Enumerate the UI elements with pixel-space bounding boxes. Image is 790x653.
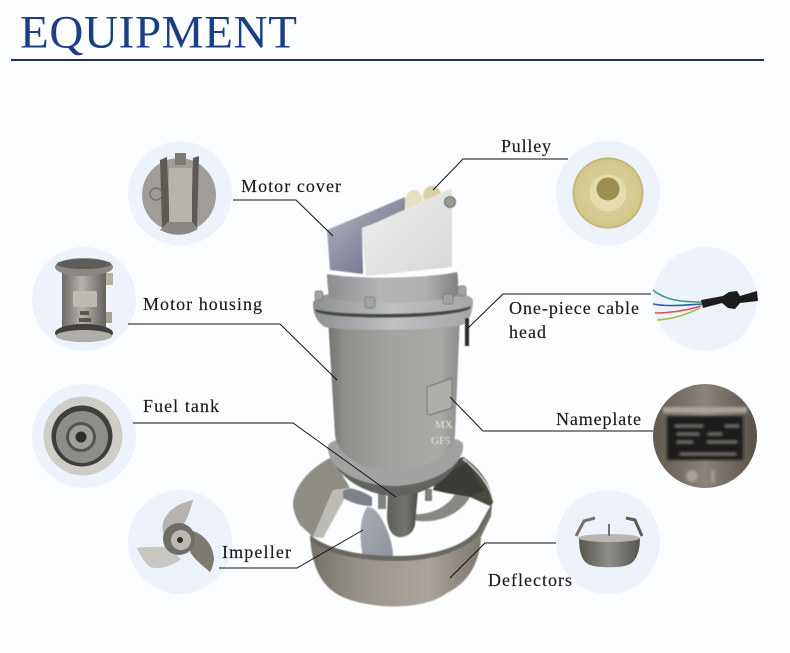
flange bbox=[313, 289, 473, 330]
embossed model text: GF5 bbox=[431, 435, 451, 447]
front lifting plate bbox=[362, 189, 452, 276]
leader line: nameplate bbox=[450, 397, 653, 431]
motor housing body bbox=[328, 315, 460, 470]
title: EQUIPMENT bbox=[20, 6, 297, 58]
thumbnail: deflectors bbox=[556, 490, 660, 594]
label: impeller: Impeller bbox=[222, 542, 291, 562]
label: one-piece cable head: One-piece cable bbox=[509, 298, 639, 318]
embossed model text: MX bbox=[435, 419, 453, 431]
thumbnail: one-piece cable head bbox=[653, 247, 758, 351]
thumbnail: motor cover bbox=[128, 142, 232, 246]
pulley wheels bbox=[405, 186, 441, 214]
main machine illustration bbox=[293, 186, 493, 606]
thumbnail: fuel tank bbox=[32, 384, 136, 488]
label: motor cover: Motor cover bbox=[241, 176, 341, 196]
label: one-piece cable head bbox=[509, 298, 639, 342]
impeller blade bbox=[360, 507, 393, 558]
stator struts bbox=[313, 462, 484, 538]
leader line: motor cover bbox=[233, 200, 333, 236]
label: pulley: Pulley bbox=[501, 136, 551, 156]
label: motor housing: Motor housing bbox=[143, 294, 262, 314]
nameplate on body bbox=[427, 378, 452, 415]
leader line: impeller bbox=[219, 530, 363, 568]
plate bolt bbox=[444, 196, 456, 208]
cable head stub bbox=[465, 318, 469, 346]
leader line: motor housing bbox=[128, 324, 337, 380]
label: fuel tank: Fuel tank bbox=[143, 396, 219, 416]
thumbnail: motor housing bbox=[32, 247, 136, 351]
rear lifting plate bbox=[327, 197, 405, 274]
thumbnail: impeller bbox=[128, 490, 232, 594]
bolts under bearing bbox=[378, 489, 432, 509]
leader line: deflectors bbox=[450, 543, 556, 578]
flange bolts bbox=[315, 286, 466, 308]
label: one-piece cable head: head bbox=[509, 322, 546, 342]
bell housing base bbox=[330, 448, 463, 496]
thumbnail: nameplate bbox=[653, 384, 757, 488]
hub bbox=[387, 490, 418, 537]
leader line: one-piece cable head bbox=[468, 294, 651, 328]
leader line: fuel tank bbox=[133, 423, 396, 497]
embossed model text bbox=[431, 419, 453, 447]
thumbnail: pulley bbox=[556, 141, 660, 245]
label: nameplate: Nameplate bbox=[556, 409, 641, 429]
deflector shroud back rim bbox=[293, 457, 493, 537]
label: deflectors: Deflectors bbox=[488, 570, 572, 590]
motor top dome bbox=[327, 272, 458, 303]
front shroud band bbox=[310, 505, 492, 606]
leader line: pulley bbox=[433, 159, 568, 190]
